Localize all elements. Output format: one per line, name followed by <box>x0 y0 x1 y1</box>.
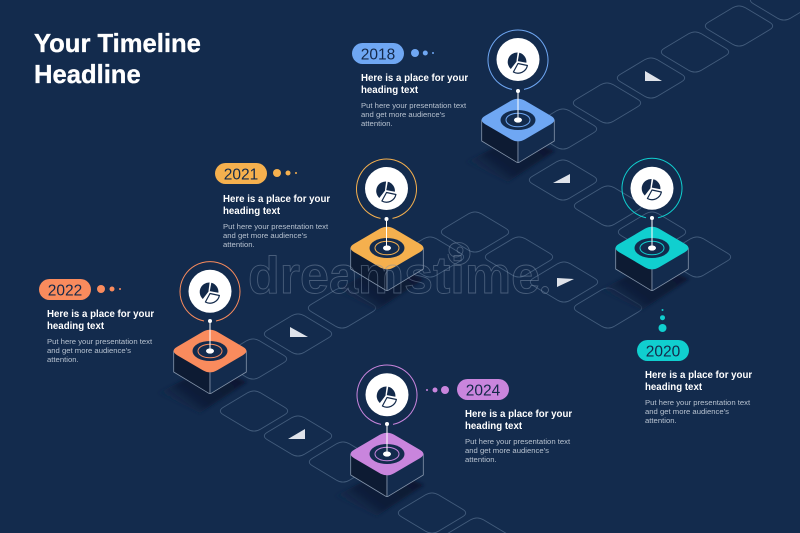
milestone 2021 <box>215 159 424 310</box>
text: attention. <box>361 119 393 128</box>
text: and get more audience's <box>465 446 549 455</box>
text: heading text <box>223 206 281 217</box>
text: heading text <box>361 85 419 96</box>
milestone 2022: 2022 <box>48 282 82 300</box>
text <box>465 409 572 464</box>
title: Your Timeline <box>34 30 201 58</box>
dots <box>97 285 105 293</box>
connector <box>209 321 211 351</box>
year pill <box>457 379 509 400</box>
text: and get more audience's <box>361 110 445 119</box>
year pill <box>352 43 404 64</box>
text: Here is a place for your <box>223 194 330 205</box>
text: attention. <box>223 240 255 249</box>
text: heading text <box>465 421 523 432</box>
text: Here is a place for your <box>47 309 154 320</box>
text: and get more audience's <box>47 346 131 355</box>
text: Here is a place for your <box>645 370 752 381</box>
cube shadow <box>335 263 424 310</box>
dots <box>411 49 419 57</box>
text: Put here your presentation text <box>465 437 571 446</box>
milestone 2021: 2021 <box>224 166 258 184</box>
text: Put here your presentation text <box>361 101 467 110</box>
dots <box>441 386 449 394</box>
tile triangles <box>288 71 662 439</box>
milestone 2018: 2018 <box>361 46 395 64</box>
text: and get more audience's <box>223 231 307 240</box>
isometric path tiles <box>219 0 800 533</box>
milestone 2024 <box>335 365 572 516</box>
year pill <box>39 279 91 300</box>
cube <box>174 330 246 394</box>
cube shadow <box>158 366 247 413</box>
ring and icon <box>357 159 416 218</box>
text: Put here your presentation text <box>223 222 329 231</box>
connector <box>386 424 388 454</box>
milestone 2022 <box>39 262 247 413</box>
milestone 2018 <box>352 30 555 182</box>
cube shadow <box>600 263 689 310</box>
milestone 2020 <box>600 158 752 425</box>
connector <box>386 219 388 248</box>
ring and icon <box>488 30 548 89</box>
connector <box>517 91 519 120</box>
text <box>361 73 468 128</box>
cube <box>482 99 554 163</box>
text: attention. <box>465 455 497 464</box>
text: attention. <box>645 416 677 425</box>
watermark: dreamstime <box>248 247 540 305</box>
text <box>223 194 330 249</box>
cube <box>351 227 423 291</box>
text: Put here your presentation text <box>47 337 153 346</box>
text: attention. <box>47 355 79 364</box>
cube <box>351 433 423 497</box>
text <box>47 309 154 364</box>
dots <box>273 169 281 177</box>
milestone 2024: 2024 <box>466 382 501 400</box>
ring and icon <box>622 158 682 218</box>
year pill <box>215 163 267 184</box>
title <box>34 30 201 89</box>
cube <box>616 227 688 291</box>
text <box>645 370 752 425</box>
cube shadow <box>466 135 555 182</box>
cube shadow <box>335 469 424 516</box>
ring and icon <box>180 262 240 321</box>
text: Put here your presentation text <box>645 398 751 407</box>
title: Headline <box>34 61 141 89</box>
text: heading text <box>645 382 703 393</box>
year pill <box>637 340 689 361</box>
connector <box>651 218 653 248</box>
text: and get more audience's <box>645 407 729 416</box>
ring and icon <box>357 365 417 424</box>
text: Here is a place for your <box>465 409 572 420</box>
text: heading text <box>47 321 105 332</box>
dots <box>658 324 666 332</box>
text: Here is a place for your <box>361 73 468 84</box>
milestone 2020: 2020 <box>646 344 681 360</box>
